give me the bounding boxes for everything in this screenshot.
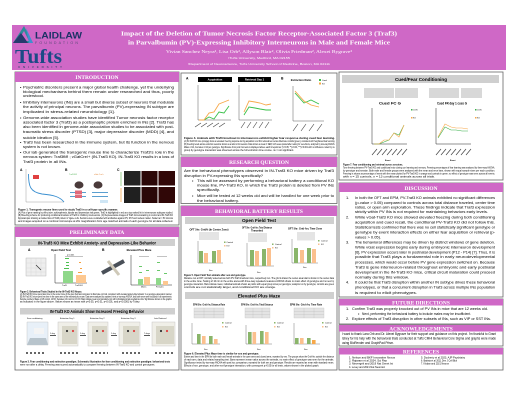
- heading: references: REFERENCES: [403, 349, 439, 355]
- caption: figure 3: were run after a delay. Freezing was scored automatically to compare freezing between IN-Traf3 KO and control genotypes.: [20, 364, 155, 366]
- text: discussion points: 2.: [346, 215, 349, 220]
- chart: open field rearing: OFT 5hr: Grid% (In Center Zone): [190, 228, 229, 232]
- caption: figure 4: (A) IN-Traf3 KO mice (orange) show an elevated freezing response during acquisition and first retrieval test versus littermate controls (green), consistent with heightened fear learning.: [184, 140, 335, 143]
- diagram: fear conditioning timeline: 1 day: [50, 333, 55, 335]
- chart: open field test: A: [28, 248, 31, 252]
- caption: figure 4: group by genotype interaction was observed across the full extinction time course. ns = not significant.: [184, 149, 294, 152]
- text: discussion points: possible that Traf3 plays a fundamental role in early neurodevelopmental: [355, 254, 495, 259]
- diagram: fear conditioning timeline: 7 days: [144, 333, 150, 335]
- text: introduction bullets: also been identified in genome-wide association studies to be associated with post-: [23, 124, 175, 129]
- caption: figure 5: in the entire zone. Testing of 10 min in the entire arena with three-way repeated-measures ANOVA shows no main effect of genotype and no sex by: [184, 280, 335, 283]
- chart: plus maze distance: Sex: [257, 349, 260, 351]
- chart: freezing acquisition: A: [186, 76, 189, 80]
- text: future directions: [346, 306, 491, 321]
- text: acknowledgements: I want to thank Lara Orb and Dr. Alexei Bygrave for their support and guidance on this project. I'm thankful to Grant: [342, 332, 496, 336]
- caption: figure 2: Figure 2. Behavioral Traits Studied in the IN-Traf3 KO Mouse.: [20, 290, 82, 294]
- text: discussion points: Statistical tests confirmed that there was no cell statistically significant genotype or: [355, 224, 496, 229]
- chart: freezing retrieval: [238, 77, 272, 120]
- figure 1B: mouse cross: Traf3 fl/fl: [69, 174, 77, 176]
- authors: Vivian Sanchez Neyra¹, Lisa Orb², Allyson Blair², Olivia Friedman², Alexei Bygrave²: [166, 49, 353, 55]
- panel: behavioral battery results: [181, 206, 337, 370]
- caption: figure 6: of each arm, data and related sampling test. Bars represent mean value across the animals, no main effect of genotype was seen for the animals.: [184, 358, 334, 362]
- chart: extinction ratio: Extinction Ratio: [291, 78, 312, 82]
- chart: freezing acquisition: Acquisition: [208, 78, 223, 82]
- text: introduction bullets: •: [20, 100, 22, 105]
- subheading: freezing behavior: [20, 308, 175, 314]
- caption: figure 6: Entries and time in the EPM for both male and female animals in the open arms and closed arms, repeated by sex. The groups show the Grid-Arc outside the distance: [184, 356, 335, 358]
- chart: open field test: p<0.001: [67, 254, 75, 256]
- text: discussion points: is required to elicit phenotypes.: [355, 290, 417, 295]
- logo: Tufts University: Tufts: [15, 46, 62, 68]
- text: introduction bullets: [20, 84, 175, 164]
- chart: elevated plus maze: Females: [156, 286, 164, 288]
- title: in Parvalbumin (PV)-Expressing Inhibitory Interneurons in Male and Female Mice: [128, 40, 390, 46]
- text: research question: Mice will be tested at 12 weeks old and will be handled for one week prior to: [197, 193, 334, 198]
- caption: figure 2: Sample numbers: Males n=15 control, 12 KO; Females n=14 control, 13 KO. Bars indicate mean and standard error with individual animals overlaid as dots. Significance shown on the graphs.: [20, 298, 172, 301]
- text: future directions: •: [358, 311, 360, 316]
- logo: Tufts University: UNIVERSITY: [18, 65, 62, 69]
- text: acknowledgements: [342, 332, 496, 345]
- chart: plus maze distance: Control: [277, 322, 284, 324]
- subheading: anxiety behavior: IN-Traf3 KO Mice Exhibit Anxiety- and Depression-Like Behavior: [38, 240, 156, 245]
- text: future directions: Confirm Traf3 was properly knocked out of PV INs in mice that are 12 weeks old.: [352, 306, 488, 311]
- text: introduction bullets: •: [20, 115, 22, 120]
- chart: cued FC: CON: [413, 110, 418, 112]
- text: introduction bullets: associated factor 3 (Traf3) as a postsynaptic protein enriched in INs [2]. Traf3 has: [23, 120, 174, 125]
- diagram: fear conditioning timeline: [26, 317, 175, 353]
- chart: open field time: Sex: [303, 267, 306, 269]
- chart: freezing acquisition: [186, 76, 232, 120]
- chart: plus maze entries: Control: [225, 322, 232, 324]
- heading: future directions: FUTURE DIRECTIONS: [392, 300, 450, 306]
- chart: open field time: KO: [321, 244, 324, 246]
- figure 1C: micrographs: C: [117, 168, 120, 172]
- subheading: open field test: Open Field Test: [242, 218, 277, 223]
- logo: Laidlaw Foundation: [13, 26, 83, 45]
- chart: freezing retrieval: Retrieval Day 1: [245, 78, 265, 82]
- text: reference list: 2. Rajaram et al 2024, Sci Rep: [349, 360, 388, 362]
- chart: extinction ratio: [195, 76, 327, 131]
- authors: [166, 49, 353, 66]
- text: research question: the behavioral battery.: [197, 198, 239, 203]
- text: research question: disruption in PV-expressing INs specifically?: [184, 173, 264, 178]
- text: discussion points: [6], PV expression occurs later in postnatal development (P12 - P14) [7]. Thus, it is: [355, 249, 495, 254]
- text: research question: [184, 168, 334, 203]
- diagram: fear conditioning timeline: Extinction Day 2: [90, 317, 105, 320]
- text: reference list: 4. Levey and 2021 Nat Neurosci: [349, 366, 385, 369]
- caption: figure 1: (B) Breeding scheme for producing conditional knockout of Traf3 in inhibitory interneurons. (C) Representative images of Traf3 immunostaining in control and IN-Traf3 KO: [18, 214, 173, 217]
- authors: ²Department of Neuroscience, Tufts University School of Medicine, Boston, MA 02111: [188, 62, 331, 66]
- chart: open field rearing: Sex: [209, 270, 212, 272]
- caption: figure 1: Figure 1. Transgenic mouse lines used to study Traf3 in a cell-type specific manner.: [18, 208, 118, 212]
- chart: elevated plus maze: Males: [141, 286, 146, 288]
- chart: open field distance: OFT 5hr: Grid-Arc Total Distance: [242, 226, 272, 230]
- caption: figure 6: [184, 352, 335, 368]
- chart: extinction ratio: B: [281, 76, 284, 80]
- chart: extinction ratio: Cond: [322, 80, 327, 82]
- text: discussion points: Traf3 is gene interneuron-related throughout embryonic and early postnatal: [355, 264, 495, 269]
- caption: figure 6: Significance tested by two-way ANOVA with post hoc comparison, repeated for both sex and genotype. Results are reported as mean with standard errors.: [184, 362, 334, 364]
- diagram: fear conditioning timeline: 1 day: [80, 333, 85, 335]
- diagram: fear conditioning timeline: 1 day: [111, 333, 116, 335]
- caption: figure 5: Distance run at OFT, similarly tested across both PV-Traf3 knockout mice, respectively run. The grid is drawn the center area total is shown in the center data: [184, 277, 335, 280]
- heading: introduction: INTRODUCTION: [75, 75, 119, 81]
- text: introduction bullets: Inhibitory interneurons (INs) are a small but diverse subset of neurons that modulate: [23, 100, 174, 105]
- chart: elevated plus maze: [102, 248, 172, 288]
- chart: open field time: [288, 226, 328, 269]
- chart: cued FR day 1: Event: [450, 159, 456, 162]
- text: introduction bullets: the activity of principal neurons. The parvalbumin (PV)-expressing IN subtype are: [23, 104, 174, 109]
- text: reference list: 6. Batista et al 2011 Dev J Cell Biol: [421, 360, 457, 362]
- caption: figure 1: [18, 208, 174, 223]
- text: discussion points: While vGat expression begins early during embryonic interneuron development: [355, 244, 496, 249]
- text: introduction bullets: suicide ideation [5].: [23, 135, 59, 140]
- subheading: cued fear conditioning: Cued/Fear Conditioning: [395, 77, 447, 82]
- text: discussion points: 1.: [346, 195, 349, 200]
- chart: open field test: Open Field Test: [51, 248, 71, 252]
- caption: figure 3: Figure 3. Fear conditioning and extinction paradigm. Schematic illustration for fear conditioning and extinction paradigm: behavioral tests: [20, 360, 171, 364]
- text: discussion points: normally during this window.: [355, 275, 409, 280]
- chart: open field distance: [242, 226, 282, 274]
- caption: figure 6: Effects of sex, genotype, and other sex*genotype interaction, with consequent p>0.05 for all tests, values shown in the plotted graph.: [184, 364, 319, 368]
- caption: figure 2: (A) IN-Traf3 KO mice spend less time in the center zone of the open field test compared to littermate controls, consistent with elevated anxiety-like behavior in a genotype-dependent manner.: [20, 293, 172, 296]
- caption: figure 5: controls are not statistically larger, and conditional KO are orange.: [184, 286, 276, 289]
- chart: elevated plus maze: Elevated Plus Maze: [127, 248, 152, 252]
- chart: cued FR day 1: [429, 88, 482, 162]
- text: research question: Are the behavioral phenotypes observed in IN-Traf3 KO mice driven by Traf3: [184, 168, 334, 173]
- text: future directions: 1.: [346, 306, 349, 311]
- chart: extinction ratio: KO: [322, 84, 325, 86]
- chart: plus maze time: Control: [325, 322, 332, 324]
- heading: acknowledgements: ACKNOWLEDGEMENTS: [389, 326, 453, 332]
- heading: research question: RESEARCH QUESTION: [229, 160, 289, 166]
- text: introduction bullets: Genome-wide association studies have identified Tumor necrosis factor receptor: [23, 115, 175, 120]
- caption: figure 4: [184, 137, 335, 152]
- diagram: fear conditioning timeline: Fear conditioning: [27, 317, 42, 320]
- caption: figure 5: genotype interaction. Bars indicate mean, individual animals shown as points with equal group sizes per genotype; analysis run by genotype; controls are green: [184, 283, 335, 286]
- subheading: cued fear conditioning: [342, 75, 499, 83]
- caption: figure 2: [20, 290, 172, 304]
- panel: research question: [181, 157, 337, 204]
- text: future directions: 2.: [346, 316, 349, 321]
- text: reference list: 7. Klodan and 2021 Neuron: [421, 362, 450, 366]
- text: research question: •: [192, 193, 194, 198]
- caption: figure 7: with n = 15 controls, n = 13 conditional animals across all trials.: [343, 176, 435, 178]
- heading: preliminary data: PRELIMINARY DATA: [70, 230, 124, 236]
- chart: open field rearing: [190, 228, 234, 272]
- caption: figure 1: (A) Plot of gene ranking by effect size; schizophrenia, bipolar and depression risk genes. Traf3 is highlighted in red as a top ranked hit in interneurons subtypes studied.: [18, 211, 173, 214]
- subheading: elevated plus maze: [185, 292, 334, 299]
- text: research question: specifically.: [197, 187, 220, 192]
- text: discussion points: genotype by event interaction effects on either fear acquisition or retrieval (p-: [355, 229, 496, 234]
- caption: figure 5: Figure 5. Open Field Test animals after sex and genotype.: [184, 274, 246, 277]
- text: discussion points: ratios, or open arm exploration. These findings indicate that Traf3 expression: [355, 205, 495, 210]
- text: reference list: [349, 356, 466, 369]
- chart: open field test: Traf3 KO: [75, 285, 83, 287]
- subheading: open field test: [185, 217, 334, 224]
- text: discussion points: It could be that Traf3 disruption within another IN subtype drives these behavioral: [355, 280, 495, 285]
- figure 1A: gene rank plot: A: [20, 168, 23, 172]
- chart: plus maze time: EPM 5hr: Grid-Arc Time Rate: [290, 302, 322, 306]
- chart: plus maze entries: KO: [225, 326, 228, 328]
- chart: plus maze entries: [192, 302, 232, 351]
- text: discussion points: [346, 195, 496, 295]
- chart: open field time: Control: [321, 240, 328, 242]
- text: discussion points: development in the IN-Traf3 KO mice, critical circuit maturation could proceed: [355, 269, 495, 274]
- text: introduction bullets: Psychiatric disorders present a major global health challenge, yet the underlying: [23, 84, 174, 89]
- caption: figure 7: Figure 7. Fear conditioning and retrieval across sessions.: [343, 164, 403, 166]
- chart: open field distance: Sex: [257, 272, 260, 274]
- header banner: [12, 25, 506, 70]
- panel: acknowledgements: [339, 325, 503, 346]
- chart: cued FC: [364, 88, 418, 162]
- chart: elevated plus maze: B: [102, 248, 105, 252]
- text: discussion points: acquisition and cued recall, the conditional PV-Traf3 KO did not follow this.: [355, 219, 495, 224]
- caption: figure 4: Figure 4. Animals with Traf3 knockout in interneurons exhibit higher fear response during cued fear learning.: [184, 137, 335, 140]
- text: research question: •: [192, 178, 194, 183]
- caption: figure 7: Tone freezing between PV-Traf3 KO and conditional mice during cue learning and memory. Freezing percentages of fear learning was analyzed by three-way ANOVA.: [343, 166, 495, 170]
- chart: plus maze distance: EPM 5hr: Grid-Arc Total Distance: [241, 302, 273, 306]
- text: discussion points: values > 0.05).: [355, 234, 381, 239]
- chart: open field distance: Control: [275, 243, 282, 246]
- text: introduction bullets: implicated in stress-related neurobiology [1].: [23, 109, 115, 114]
- chart: cued FR day 1: CON: [477, 110, 482, 112]
- chart: open field rearing: KO: [226, 246, 230, 248]
- chart: open field rearing: Control: [226, 241, 234, 244]
- caption: figure 3: [20, 360, 171, 366]
- caption: figure 6: Figure 6. Elevated Plus Maze time is similar for sex and genotype.: [184, 352, 259, 356]
- caption: figure 1: hippocampus showing a marked loss of Traf3 protein in Vgat+ cells. Sections were co-labelled with antibodies against PV, SST and nuclear marker. Scale bar = 50 microns: [18, 217, 174, 220]
- chart: plus maze entries: EPM 5hr: Grid-Arc Distance Rate: [193, 302, 225, 306]
- caption: figure 1: and images acquired on a confocal microscope at 20x magnification from age matched animals of each genotype for all data collected.: [18, 220, 173, 223]
- chart: cued FR day 1: Cued FR day 1 cues G: [437, 102, 467, 106]
- heading: discussion: DISCUSSION: [405, 186, 438, 192]
- panel: discussion: [339, 183, 503, 297]
- chart: cued FC: Cued FC G: [379, 102, 402, 106]
- text: discussion points: 4.: [346, 280, 349, 285]
- diagram: fear conditioning timeline: Extinction Day 3: [121, 317, 136, 320]
- panel: introduction: [15, 72, 179, 225]
- text: reference list: 3. Nievergelt and 2019 Nat Genet Int: [349, 362, 393, 366]
- text: introduction bullets: •: [20, 150, 22, 155]
- chart: open field test: [26, 248, 87, 287]
- chart: open field distance: KO: [275, 248, 278, 250]
- chart: plus maze time: [290, 302, 332, 351]
- text: introduction bullets: system is not known.: [23, 144, 61, 149]
- text: reference list: 1. Nelson and BKF Innovative Nexus: [349, 356, 396, 360]
- caption: figure 4: (B) Freezing levels across extinction sessions shown as a ratio to first session. Data shown as mean ± SEM, both sexes pooled after testing for sex effects, analyzed by two-way ANOVA.: [184, 143, 335, 146]
- logo: Laidlaw Foundation: FOUNDATION: [35, 41, 78, 45]
- text: discussion points: The behavioral differences may be driven by distinct windows of gene deletion.: [355, 240, 495, 245]
- text: acknowledgements: using BioRender and GraphPad Prism.: [342, 341, 394, 345]
- caption: figure 7: [343, 164, 495, 178]
- panel: figure behavior results top: [181, 73, 337, 155]
- text: discussion points: In both the OFT and EPM, PV-Traf3 KO animals exhibited no significant differences: [355, 195, 495, 200]
- chart: open field time: OFT 5hr: Grid-Arc Time Zone: [288, 226, 322, 230]
- text: reference list: 5. Docherty et al 2023, AJP Psychiatry: [421, 356, 466, 360]
- text: introduction bullets: •: [20, 140, 22, 145]
- text: discussion points: processes, which would occur before PV gene expression switched on. Because: [355, 259, 495, 264]
- figure 1B: mouse cross: B: [65, 168, 68, 172]
- chart: open field distance: Traveled: [251, 228, 263, 232]
- chart: cued FC: Event: [385, 159, 391, 162]
- panel: references: [339, 348, 503, 370]
- text: introduction bullets: traumatic stress disorder (PTSD) [3], major depressive disorder (MDD) [4], and: [23, 129, 174, 134]
- text: acknowledgements: Ishey for his help with the behavioral trials conducted at Tufts CMHI Behavioral Core Sigma and graphs were made: [342, 336, 496, 340]
- text: research question: mouse line, PV-Traf3 KO, in which the Traf3 protein is deleted from PV INs: [197, 183, 334, 188]
- text: discussion points: While vGat-Traf3 KO mice showed elevated freezing during both conditioning: [355, 215, 495, 220]
- caption: figure 4: Males n=14, Females n=12 per genotype. Significance from post hoc tests is displayed above each timepoint as *p<0.05, **p<0.01, ***p<0.001 with no difference noted by ns.: [184, 146, 335, 149]
- caption: figure 7: by genotype and session. Both male and female groups were analyzed with the mean and error bars, shown with equal sample sizes per each condition.: [343, 170, 495, 172]
- caption: figure 2: as indicated in the figure above. Values shown as mean with p<0.05, p<0.01, p<0.001, and p<0.0001 by Tukey.: [20, 300, 140, 304]
- title: [121, 30, 397, 46]
- figure 1C: micrographs: [117, 168, 175, 203]
- text: introduction bullets: Traf3 has been researched in the immune system, but its function in the nervous: [23, 140, 174, 145]
- authors: ¹Tufts University, Medford, MA 02155: [228, 56, 291, 60]
- text: research question: This will be assessed by performing a behavioral battery a conditional KO: [197, 178, 334, 183]
- chart: plus maze distance: [241, 302, 284, 351]
- diagram: fear conditioning timeline: Late Retrieval: [154, 317, 167, 320]
- text: introduction bullets: biological mechanisms behind them remain under researched and thus, poorly: [23, 89, 174, 94]
- chart: open field test: Traf3: [62, 285, 67, 287]
- chart: plus maze distance: KO: [277, 326, 280, 328]
- text: discussion points: (p-value > 0.05) compared to controls across total distance traveled, center time: [355, 200, 495, 205]
- text: introduction bullets: nervous system: Traf3fl/fl ; vGatCre/+ (IN-Traf3 KO). IN-Traf3 KO results in a loss of: [23, 154, 175, 159]
- caption: figure 5: [184, 274, 335, 289]
- panel: future directions: [339, 299, 503, 324]
- text: introduction bullets: Our lab generated the transgenic mouse line to characterize Traf3's role in the: [23, 150, 174, 155]
- figure 1B: mouse cross: vGat Cre/+: [94, 173, 105, 176]
- text: future directions: Next, performing the behavioral battery to include males may be insufficient.: [362, 311, 471, 316]
- panel: preliminary data: [15, 227, 179, 370]
- caption: figure 2: (B) IN-Traf3 KO mice spent less time in the open arms of the elevated plus maze. Data were analyzed by unpaired t-test or two-way ANOVA, and both sexes were included in all experiments.: [20, 296, 172, 298]
- title: Impact of the Deletion of Tumor Necrosis Factor Receptor-Associated Factor 3 (Traf3): [121, 30, 397, 38]
- chart: cued FC: KO: [413, 118, 416, 120]
- chart: plus maze time: KO: [325, 326, 328, 328]
- text: introduction bullets: •: [20, 84, 22, 89]
- figure 1A: gene rank plot: [20, 168, 64, 202]
- chart: plus maze time: Sex: [304, 349, 307, 351]
- subheading: elevated plus maze: Elevated Plus Maze: [238, 293, 281, 298]
- text: future directions: Explore effects of Traf3 disruption in other subsets of INs, such as VIP or SST INs.: [352, 316, 491, 321]
- subheading: freezing behavior: IN-Traf3 KO Animals Show Increased Freezing Behavior: [50, 309, 144, 314]
- text: discussion points: phenotypes, or that a concurrent disruption in Traf3 across multiple INs population: [355, 285, 495, 290]
- caption: figure 7: Freezing is shown as percentage of event with the mean plotted for PV-Traf3 KO in orange and controls in green; no effect of genotype was seen across all events.: [343, 172, 495, 176]
- diagram: fear conditioning timeline: Extinction Day 1: [60, 317, 75, 320]
- panel: cued fear conditioning: [339, 72, 503, 180]
- text: introduction bullets: Traf3 protein in all INs.: [23, 159, 67, 164]
- figure 1B: mouse cross: [65, 168, 108, 203]
- text: discussion points: strictly within PV INs is not required for maintaining behaviors early levels.: [355, 209, 488, 214]
- text: introduction bullets: understood.: [23, 93, 44, 98]
- chart: plus maze entries: Sex: [204, 349, 207, 351]
- text: discussion points: 3.: [346, 240, 349, 245]
- logo: Laidlaw Foundation: LAIDLAW: [35, 30, 83, 42]
- chart: cued FR day 1: KO: [477, 118, 480, 120]
- heading: behavioral battery results: BEHAVIORAL BATTERY RESULTS: [215, 209, 303, 215]
- subheading: anxiety behavior: [20, 239, 175, 246]
